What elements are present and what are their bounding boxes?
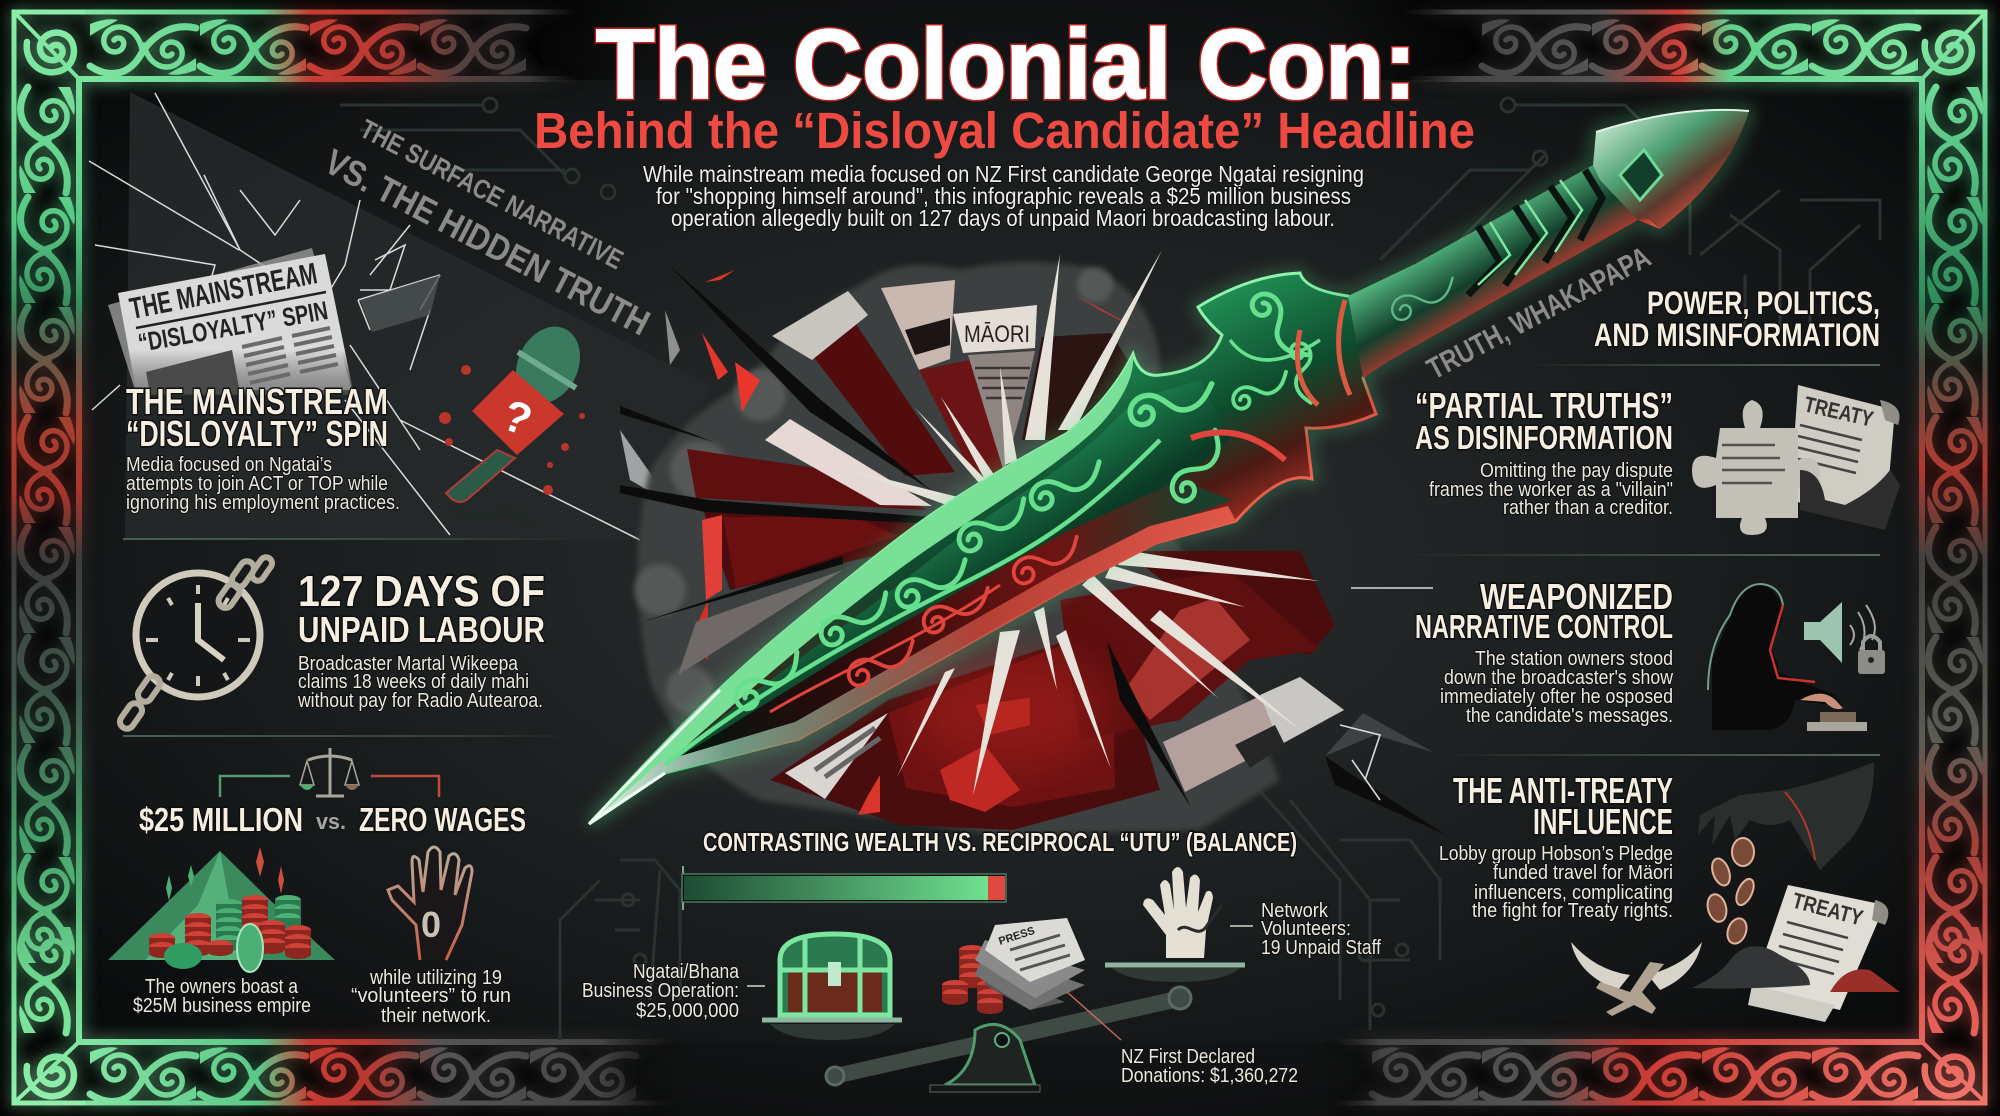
divider line (1400, 554, 1880, 556)
label: NZ First donations: Donations: $1,360,272 (1121, 1065, 1298, 1087)
label: Ngatai/Bhana business: Business Operation: (582, 980, 739, 1002)
text: volunteers (351, 967, 511, 1027)
heading: power, politics: POWER, POLITICS, (1647, 285, 1880, 321)
divider line (1520, 364, 1880, 366)
divider line (123, 538, 573, 540)
heading: 127 days: 127 DAYS OF (298, 567, 545, 616)
icon: document stack: PRESS (997, 925, 1036, 948)
label: network volunteers (1261, 900, 1381, 959)
sword glow (589, 110, 1749, 824)
title: The Colonial Con: (596, 9, 1416, 119)
heading: contrasting wealth: CONTRASTING WEALTH VS. RECIPROCAL “UTU” (BALANCE) (703, 827, 1297, 857)
text: partial truths body: frames the worker as a "villain" (1429, 479, 1673, 501)
diagonal heading: surface narrative vs hidden truth: THE SURFACE NARRATIVE (355, 114, 628, 275)
black cracks (620, 265, 1446, 835)
heading: mainstream spin: “DISLOYALTY” SPIN (126, 413, 388, 454)
white tip highlight (589, 690, 720, 824)
icon: clock with broken chains (117, 555, 274, 731)
label: network volunteers: Volunteers: (1261, 918, 1351, 940)
text: volunteers: “volunteers” to run (351, 985, 511, 1007)
text: owners boast (133, 976, 311, 1017)
text: 127 days body: claims 18 weeks of daily mahi (298, 671, 529, 693)
icon: puzzle and treaty scroll: TREATY (1802, 392, 1876, 432)
icon: microphone (439, 316, 592, 528)
text: owners boast: $25M business empire (133, 995, 311, 1017)
text: anti-treaty body (1439, 843, 1673, 922)
blade red swirl engraving (770, 432, 1285, 712)
text: mainstream spin body (126, 454, 400, 514)
text: owners boast: The owners boast a (145, 976, 299, 998)
intro paragraph: operation allegedly built on 127 days of unpaid Maori broadcasting labour. (671, 205, 1335, 231)
text: weaponized body: immediately ofter he osposed (1440, 686, 1673, 708)
text: mainstream spin body: Media focused on Ngatai’s (126, 454, 332, 476)
explosion collage (620, 250, 1446, 835)
blade upper engraved field (625, 380, 1230, 800)
heading: 127 days: UNPAID LABOUR (298, 609, 545, 650)
icon: open hand with chain (1143, 867, 1222, 958)
heading: partial truths: AS DISINFORMATION (1415, 419, 1673, 456)
heading: power, politics: AND MISINFORMATION (1594, 317, 1880, 353)
text: partial truths body: Omitting the pay dispute (1480, 460, 1673, 482)
text: 127 days body (297, 653, 543, 712)
icon: balance scale with brackets (220, 748, 439, 797)
icon: microphone: ? (496, 391, 538, 446)
icon: empty hand with zero: 0 (421, 904, 441, 945)
heading: 127 days (298, 567, 545, 650)
text: anti-treaty body: funded travel for Mäori (1493, 862, 1673, 884)
treaty scroll (1752, 885, 1885, 1010)
label: NZ First donations: NZ First Declared (1121, 1046, 1255, 1068)
label: NZ First donations (1121, 1046, 1298, 1087)
icon: silhouette pressing button with muted speaker (1708, 584, 1885, 731)
icon: treasure chest (780, 934, 890, 1015)
label: Ngatai/Bhana business (582, 961, 740, 1022)
dark red slabs (687, 270, 1335, 830)
text: volunteers: their network. (381, 1005, 491, 1027)
text: anti-treaty body: the fight for Treaty rights. (1472, 900, 1673, 922)
text: weaponized body (1440, 648, 1673, 727)
winged plane (1571, 942, 1702, 990)
heading: mainstream spin (126, 381, 388, 454)
blade lower dark field (655, 480, 1232, 772)
intro paragraph: While mainstream media focused on NZ First candidate George Ngatai resigning (643, 161, 1364, 187)
panel: shattered glass (89, 92, 710, 540)
label: network volunteers: 19 Unpaid Staff (1261, 937, 1381, 959)
label: Ngatai/Bhana business: Ngatai/Bhana (633, 961, 740, 983)
spear head (1593, 110, 1749, 229)
hero sword (589, 110, 1749, 824)
diagonal label: truth, whakapapa: TRUTH, WHAKAPAPA (1422, 241, 1656, 386)
torn newspapers: MĀORI (964, 321, 1030, 348)
heading: weaponized: NARRATIVE CONTROL (1415, 608, 1673, 645)
comparison heading: $25 million vs zero wages: ZERO WAGES (359, 801, 526, 838)
icon: newspaper (108, 248, 354, 395)
subtitle: Behind the “Disloyal Candidate” Headline (534, 102, 1475, 159)
comparison heading: $25 million vs zero wages: vs. (316, 809, 346, 834)
torn newspapers (678, 280, 1433, 799)
icon: puzzle and treaty scroll (1692, 385, 1900, 535)
heading: power, politics (1594, 285, 1880, 353)
divider line (1440, 754, 1880, 756)
label: network volunteers: Network (1261, 900, 1329, 922)
text: weaponized body: The station owners stood (1475, 648, 1673, 670)
text: mainstream spin body: ignoring his employment practices. (126, 492, 400, 514)
text: volunteers: while utilizing 19 (369, 967, 502, 989)
diagonal heading: surface narrative vs hidden truth: VS. THE HIDDEN TRUTH (318, 141, 657, 343)
divider line (123, 735, 573, 737)
heading: partial truths (1415, 385, 1673, 456)
scale beam and stand (835, 990, 1184, 1084)
text: partial truths body: rather than a creditor. (1503, 497, 1673, 519)
icon: hand dropping coins onto treaty: TREATY (1790, 888, 1866, 931)
text: 127 days body: without pay for Radio Autearoa. (297, 690, 543, 712)
heading: partial truths: “PARTIAL TRUTHS” (1415, 385, 1673, 426)
comparison heading: $25 million vs zero wages: $25 MILLION (139, 801, 303, 838)
icon: mountain of coins (108, 847, 335, 972)
text: weaponized body: down the broadcaster's show (1444, 667, 1673, 689)
title: The Colonial Con: (596, 9, 1416, 119)
grip (1348, 165, 1660, 378)
icon: empty hand with zero (388, 847, 472, 960)
blade lower edge (589, 506, 1236, 824)
diagonal heading: surface narrative vs hidden truth (318, 114, 657, 343)
heading: anti-treaty (1453, 770, 1673, 842)
icon: newspaper: “DISLOYALTY” SPIN (136, 295, 330, 358)
text: 127 days body: Broadcaster Martal Wikeepa (298, 653, 519, 675)
icon: hand dropping coins onto treaty (1571, 762, 1900, 1022)
comparison heading: $25 million vs zero wages (139, 801, 526, 838)
text: weaponized body: the candidate's messages. (1466, 705, 1673, 727)
heading: anti-treaty: INFLUENCE (1533, 801, 1673, 842)
label: Ngatai/Bhana business: $25,000,000 (636, 1000, 739, 1022)
blade and guard body (589, 273, 1400, 824)
text: mainstream spin body: attempts to join ACT or TOP while (126, 473, 388, 495)
heading: anti-treaty: THE ANTI-TREATY (1453, 770, 1673, 811)
intro paragraph: for "shopping himself around", this infographic reveals a $25 million business (656, 183, 1351, 209)
smoke cloud (638, 262, 1280, 835)
bar chart: wealth proportion (682, 866, 1006, 910)
blade and guard swirl engraving (665, 288, 1320, 765)
text: anti-treaty body: Lobby group Hobson’s Pledge (1439, 843, 1673, 865)
balance scale illustration (747, 867, 1253, 1092)
icon: red coins (942, 945, 1003, 1014)
intro paragraph (643, 161, 1364, 231)
heading: mainstream spin: THE MAINSTREAM (126, 381, 388, 422)
icon: newspaper: THE MAINSTREAM (127, 257, 320, 326)
text: anti-treaty body: influencers, complicating (1474, 882, 1673, 904)
circuit traces background (340, 98, 1880, 1040)
heading: weaponized (1415, 576, 1673, 645)
icon: document stack (975, 918, 1085, 1010)
heading: weaponized: WEAPONIZED (1480, 576, 1673, 617)
text: partial truths body (1429, 460, 1673, 519)
white burst shards (850, 250, 1320, 795)
blade upper bright edge (589, 354, 1133, 824)
